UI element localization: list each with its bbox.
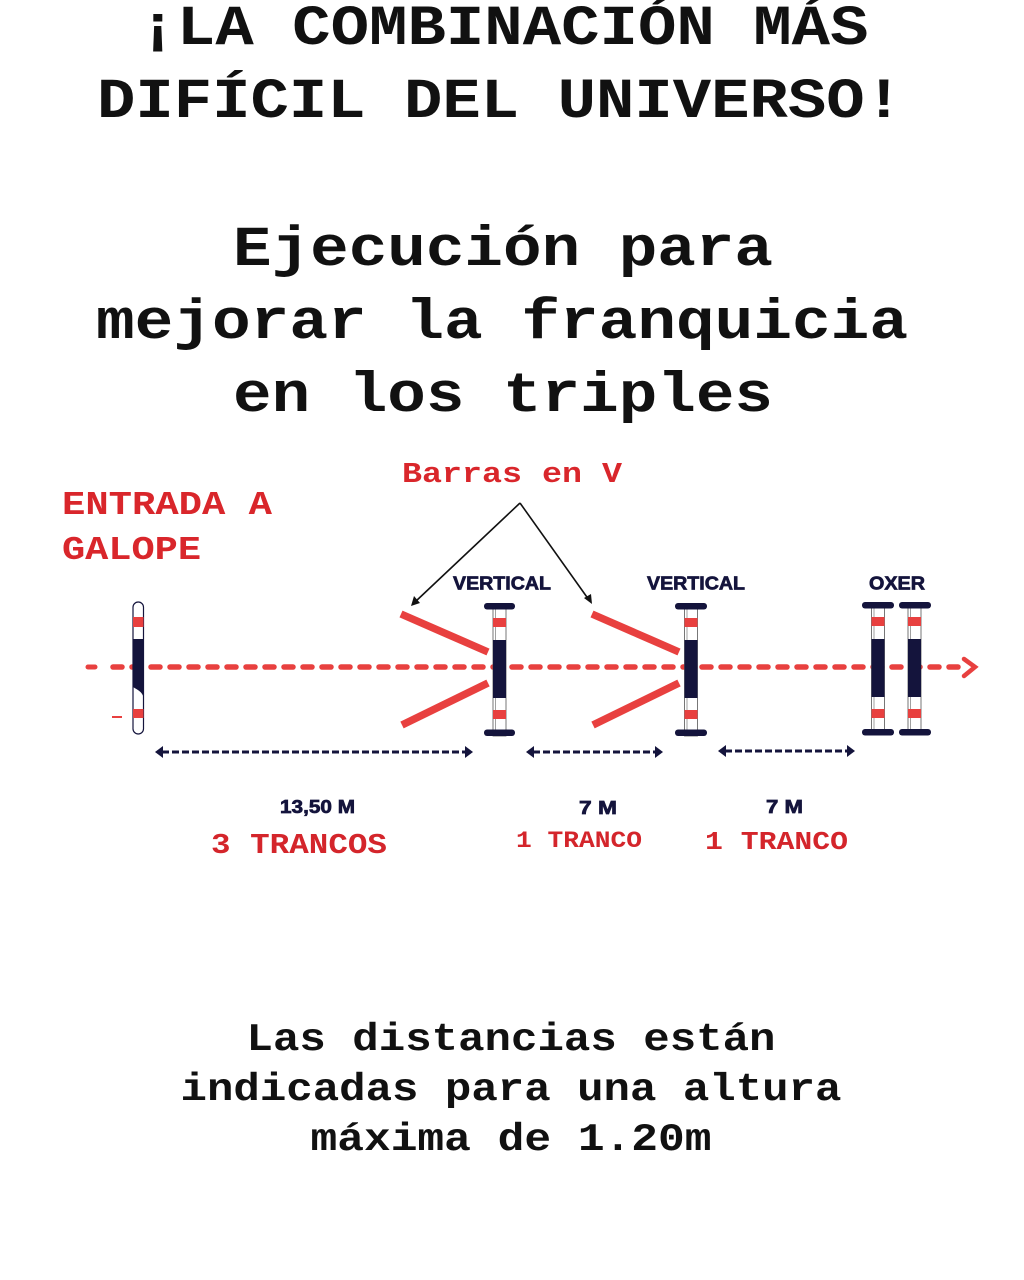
footer note: Las distancias están	[246, 1018, 776, 1062]
label: entrada a galope: ENTRADA A	[62, 487, 272, 524]
subtitle: mejorar la franquicia	[96, 292, 908, 356]
label: entrada a galope	[62, 487, 272, 569]
subtitle: Ejecución para	[233, 219, 773, 283]
subtitle: en los triples	[233, 365, 773, 429]
footer note: máxima de 1.20m	[310, 1118, 712, 1162]
footer note	[180, 1018, 842, 1162]
fence: second vertical	[675, 603, 707, 736]
footer note: indicadas para una altura	[180, 1068, 842, 1112]
distance labels: 7 M	[766, 797, 803, 817]
stride labels: 1 TRANCO	[705, 827, 848, 857]
label: barras en V: Barras en V	[402, 458, 623, 491]
label: entrada a galope: GALOPE	[62, 532, 201, 569]
distance labels: 13,50 M	[280, 797, 355, 817]
subtitle	[96, 219, 908, 429]
fence: entry pole	[112, 602, 144, 734]
course line arrow	[88, 659, 975, 676]
title: DIFÍCIL DEL UNIVERSO!	[97, 69, 903, 135]
arrows: barras en V pointers	[411, 503, 592, 606]
distance labels	[280, 797, 803, 818]
distance labels: 7 M	[579, 798, 617, 818]
fence labels	[453, 574, 925, 594]
fence: oxer	[862, 602, 931, 736]
stride labels	[211, 827, 848, 862]
V bars: second vertical	[592, 614, 679, 725]
fence labels: VERTICAL	[453, 574, 551, 594]
V bars: first vertical	[401, 614, 488, 725]
distance arrows	[155, 745, 855, 758]
fence: first vertical	[484, 603, 515, 736]
stride labels: 1 TRANCO	[516, 828, 642, 854]
fence labels: VERTICAL	[647, 574, 745, 594]
fence labels: OXER	[869, 574, 925, 594]
stride labels: 3 TRANCOS	[211, 829, 387, 862]
title	[97, 0, 903, 135]
